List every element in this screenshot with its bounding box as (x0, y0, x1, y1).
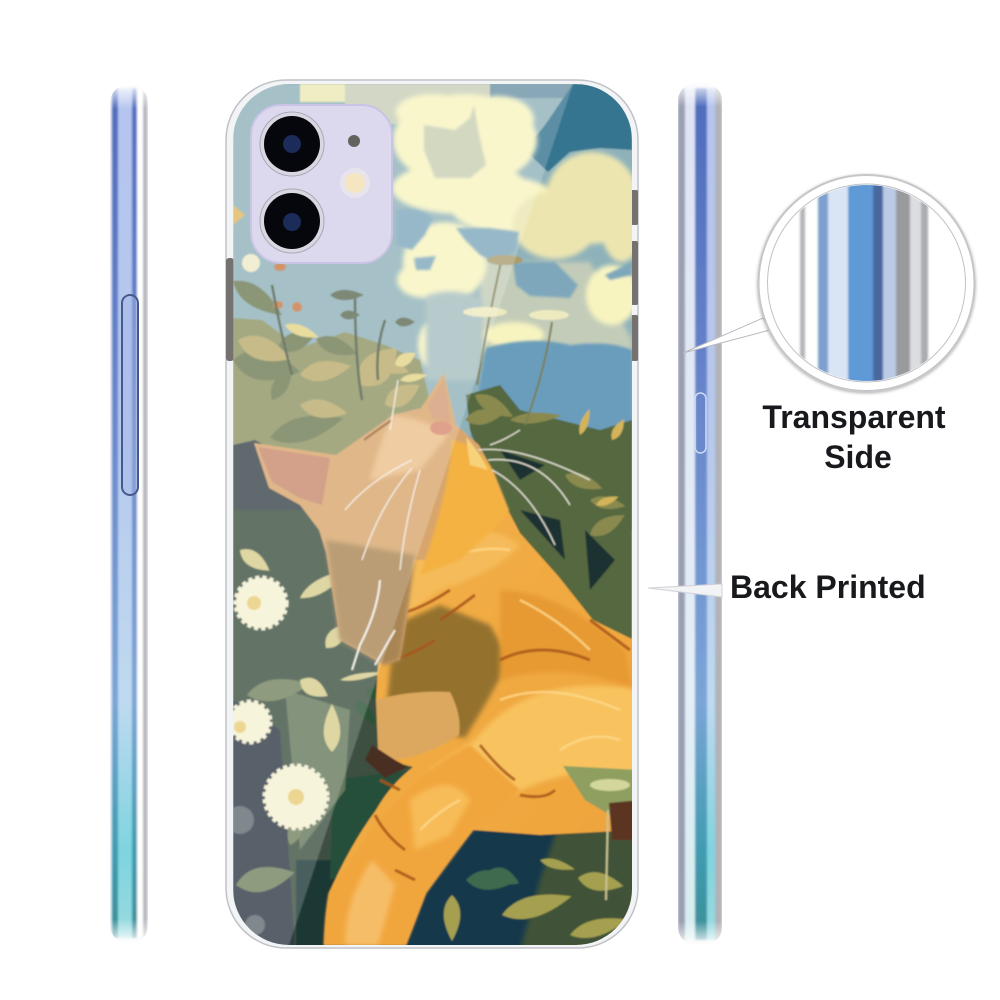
side button (695, 393, 706, 453)
microphone (348, 135, 360, 147)
plant over cat leg (563, 766, 640, 900)
flower sprig (352, 580, 395, 670)
pointer line to back print (648, 584, 722, 597)
foliage right of cat (464, 385, 632, 660)
sage sky band (480, 262, 632, 352)
daisies (226, 578, 327, 935)
foliage lower right (406, 829, 632, 945)
phone case back (226, 80, 644, 950)
orange berries (273, 263, 302, 312)
lenses (260, 112, 324, 253)
flash (340, 168, 370, 198)
foliage upper left (233, 205, 430, 511)
callout: transparent side magnifier (683, 175, 974, 391)
side button (122, 295, 138, 495)
sky (233, 80, 644, 530)
foliage lower left (233, 510, 413, 950)
printed artwork (226, 80, 644, 950)
camera module (251, 105, 392, 263)
stems with sprigs (463, 255, 569, 425)
clouds (392, 94, 638, 367)
tucked paw (376, 692, 460, 760)
left side view of case (110, 85, 148, 943)
label: Transparent Side (762, 399, 946, 475)
side buttons (226, 190, 638, 361)
cat body (324, 510, 640, 945)
glass reflection (233, 84, 573, 945)
label: Back Printed: Back Printed (730, 569, 926, 605)
cat head (254, 373, 590, 665)
label: Transparent Side: Transparent (762, 399, 946, 435)
right side view of case (678, 83, 722, 945)
label: Transparent Side: Side (824, 439, 892, 475)
